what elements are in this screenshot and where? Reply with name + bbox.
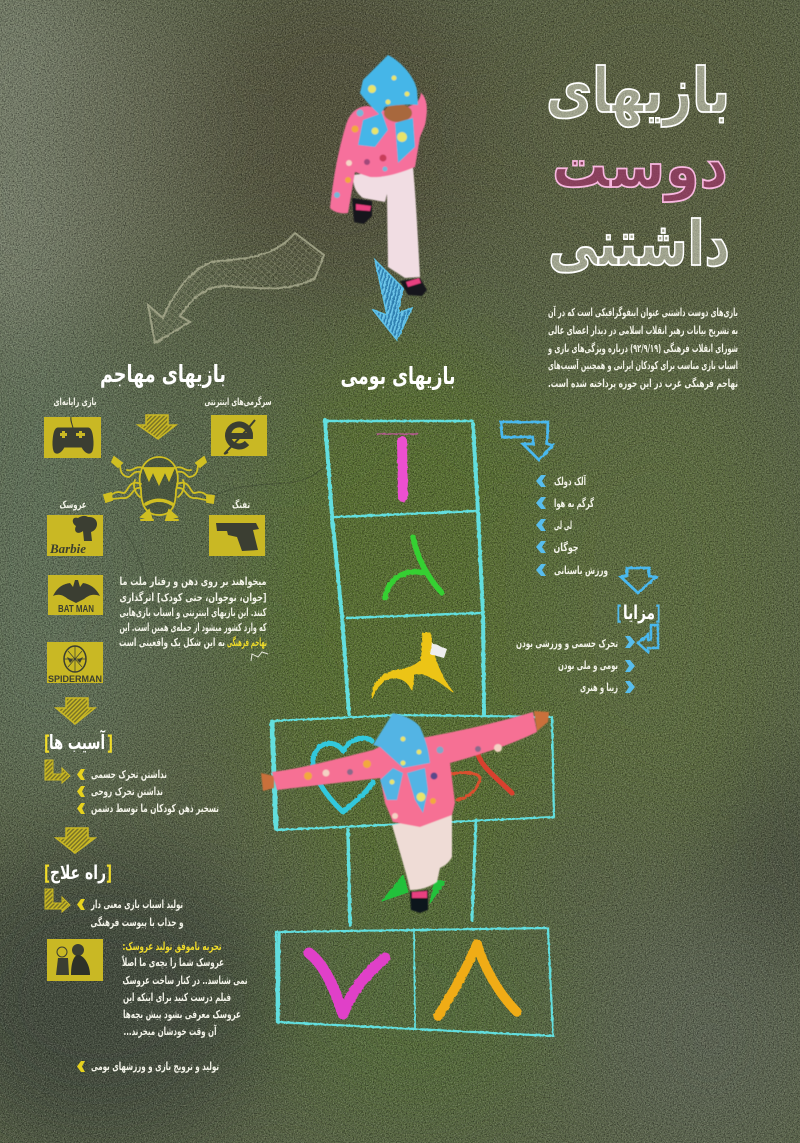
- heading: native games: بازیهای بومی: [340, 362, 456, 390]
- heading: harms: آسیب ها: [49, 729, 106, 754]
- icon label: gun: تفنگ: [232, 499, 250, 511]
- chalk arrow to native games list: [501, 422, 553, 460]
- icon: spiderman: SPIDERMAN: [48, 674, 102, 684]
- paragraph: cultural invasion: میخواهند بر روی ذهن و رفتار ملت ما: [120, 575, 266, 588]
- scarf tails: [358, 113, 415, 163]
- icon label: internet: سرگرمی‌های اینترنتی: [204, 395, 272, 408]
- list: native games: لی لی: [554, 519, 572, 532]
- icon: batman: [48, 575, 103, 615]
- arrow down to harms: [56, 698, 95, 724]
- list item: native sports: [77, 1060, 219, 1073]
- number 6: [382, 875, 445, 903]
- list: harms: نداشتن تحرک جسمی: [91, 768, 167, 781]
- chalk arrow down to benefits: [621, 568, 656, 593]
- right shoe: [400, 278, 427, 296]
- trousers: [392, 812, 452, 890]
- paper scrap: [430, 643, 447, 658]
- number 4 heart: [313, 738, 373, 812]
- number 2: [385, 537, 442, 598]
- heading: harms: ]: [44, 731, 50, 755]
- title line 2: دوست: [552, 129, 728, 202]
- blue chevrons: [536, 475, 546, 576]
- chalk net arrow pointing to foreign games: [148, 233, 324, 343]
- heading: benefits: [: [656, 601, 660, 625]
- yellow L arrow: [45, 889, 70, 912]
- heading: harms: [: [107, 731, 113, 755]
- number 7: [309, 953, 385, 1014]
- number 8: [438, 944, 517, 1016]
- title line 1: بازیهای: [546, 54, 730, 127]
- list: harms: تسخیر ذهن کودکان ما توسط دشمن: [91, 802, 219, 815]
- icon: barbie doll: [47, 515, 103, 556]
- hands: [261, 773, 274, 791]
- chevrons: [625, 636, 635, 693]
- trousers: [353, 167, 420, 278]
- icon: internet explorer: [211, 415, 267, 456]
- heading: benefits: ]: [616, 601, 622, 625]
- icon: gun: [209, 515, 265, 556]
- chevron: [77, 899, 85, 910]
- paragraph: cultural invasion: تهاجم فرهنگی: [227, 636, 267, 649]
- heading: remedy: ]: [44, 861, 50, 885]
- yellow L arrow: [45, 760, 70, 783]
- list: native games: [536, 474, 608, 577]
- icon: spiderman: [47, 642, 103, 684]
- text: failed doll experience: نمی شناسد.. در کنار ساخت عروسک: [122, 974, 248, 987]
- arrow down to monster: [138, 415, 176, 439]
- list: benefits: زیبا و هنری: [580, 681, 618, 694]
- list: benefits: بومی و ملی بودن: [558, 659, 618, 672]
- scarf head: [360, 55, 418, 115]
- heading: foreign games: بازیهای مهاجم: [100, 360, 226, 388]
- text: failed doll experience: آن وقت خودشان میخرند...: [124, 1024, 217, 1038]
- heading: benefits: [616, 601, 660, 625]
- girl standing on top: [330, 55, 427, 296]
- number 5: [448, 755, 512, 800]
- icon: game controller: [44, 417, 101, 458]
- list: harms: [45, 760, 219, 815]
- paragraph: cultural invasion: کنند. این بازیهای اینترنتی و اسباب بازی‌هایی: [120, 606, 267, 619]
- paragraph: cultural invasion: [119, 575, 267, 649]
- arrow down to remedy: [56, 828, 95, 853]
- heading: harms: [44, 729, 113, 755]
- list: native games: آلک دولک: [554, 474, 586, 488]
- list: harms: نداشتن تحرک روحی: [91, 785, 163, 798]
- icon label: doll: عروسک: [60, 500, 86, 511]
- paragraph: cultural invasion: [جوان، نوجوان، حتی کودک] اثرگذاری: [120, 591, 266, 604]
- icon: dolls: [47, 939, 103, 981]
- sweater and arms: [272, 712, 537, 827]
- icon label: computer game: بازی رایانه‌ای: [54, 397, 96, 408]
- intro paragraph: [547, 305, 738, 390]
- list: benefits: تحرک جسمی و ورزشی بودن: [516, 637, 618, 650]
- blue arrow under girl: [373, 260, 412, 340]
- title: [546, 54, 730, 280]
- icon: monster: [104, 457, 214, 520]
- number 3: [372, 633, 453, 698]
- chalk numbers: [309, 434, 517, 1016]
- chevrons: [77, 769, 85, 814]
- heading: remedy: راه علاج: [50, 862, 106, 884]
- blue L arrow: [638, 625, 658, 652]
- scarf head: [373, 713, 430, 768]
- number 1: [377, 434, 418, 497]
- scarf tails: [380, 768, 428, 813]
- text: failed doll experience: عروسک معرفی بشود پیش بچه‌ها: [123, 1008, 241, 1021]
- heading: remedy: [44, 861, 112, 885]
- icons: foreign games: [44, 395, 272, 684]
- list: remedy: تولید اسباب بازی معنی دار: [90, 898, 183, 911]
- list: remedy: و جذاب با پیوست فرهنگی: [90, 916, 184, 929]
- list item: native sports: تولید و ترویج بازی و ورزشهای بومی: [91, 1060, 219, 1073]
- icon: barbie doll: Barbie: [49, 541, 86, 556]
- list: native games: گرگم به هوا: [554, 497, 594, 510]
- list: benefits: [516, 625, 658, 694]
- icon: batman: BAT MAN: [58, 604, 94, 615]
- heading: remedy: [: [106, 861, 112, 885]
- left shoe: [352, 198, 372, 224]
- text: failed doll experience: عروسک شما را بچه‌ی ما اصلاً: [122, 954, 224, 969]
- text: failed doll experience: [122, 940, 248, 1038]
- list: remedy: [45, 889, 184, 929]
- hopscotch chalk grid: [271, 420, 554, 1036]
- text: failed doll experience: فیلم درست کنید برای اینکه این: [123, 991, 231, 1004]
- text: failed doll experience: تجربه ناموفق تولید عروسک:: [122, 940, 222, 953]
- sweater: [330, 92, 427, 213]
- face: [384, 104, 412, 122]
- paragraph: cultural invasion: که وارد کشور میشود از جمله‌ی همین است. این: [120, 621, 267, 634]
- list: native games: ورزش باستانی: [554, 564, 608, 577]
- title line 3: داشتنی: [548, 207, 730, 280]
- paragraph: cultural invasion: به این شکل یک واقعیتی است: [119, 636, 225, 649]
- shoe: [410, 890, 428, 913]
- list: native games: چوگان: [554, 541, 578, 554]
- signature: [251, 652, 268, 661]
- girl with arms outstretched: [261, 711, 549, 913]
- heading: benefits: مزایا: [623, 602, 655, 624]
- intro paragraph: شورای انقلاب فرهنگی (۹۲/۹/۱۹) درباره ویژگی‌های بازی و: [547, 342, 738, 355]
